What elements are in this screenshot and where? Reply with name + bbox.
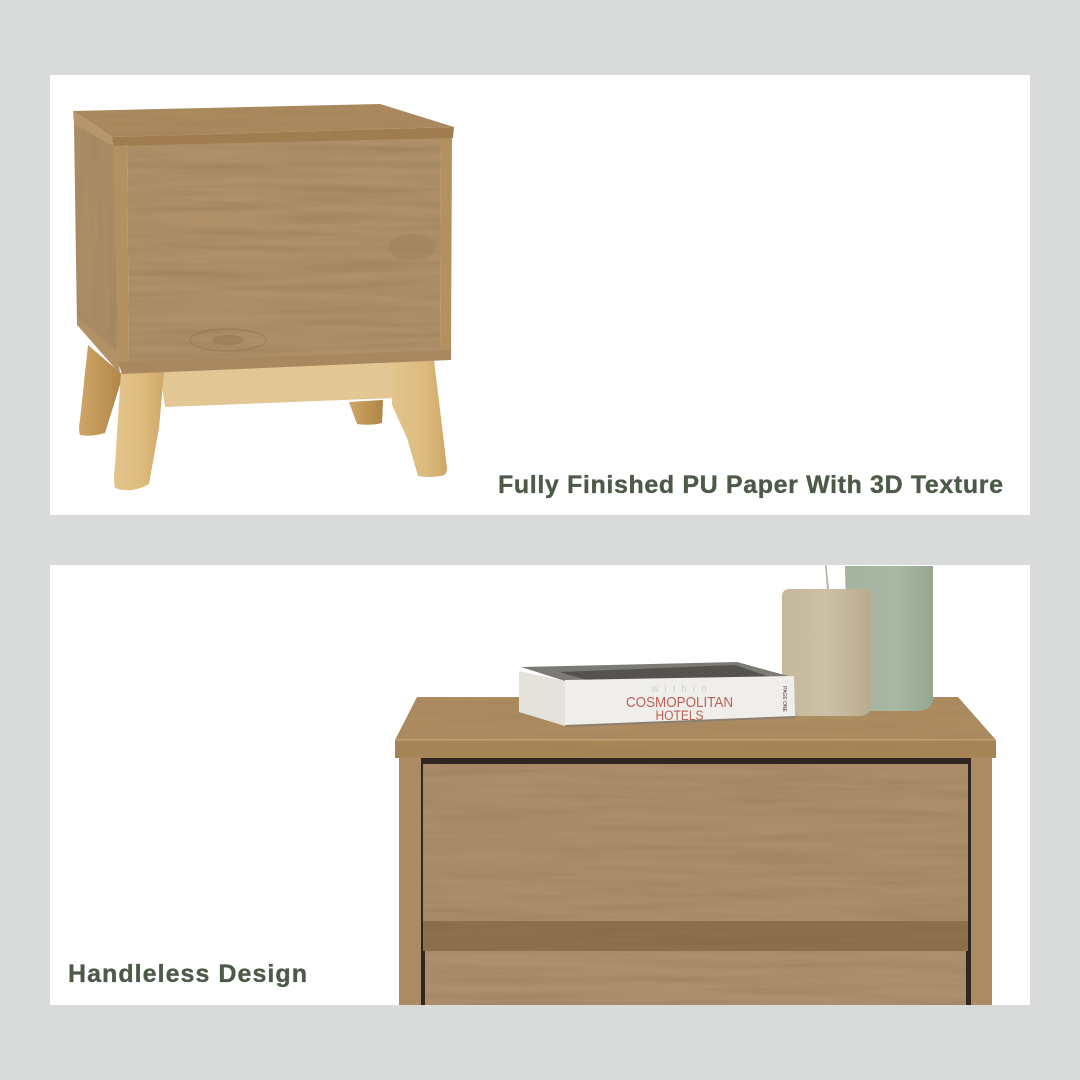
- panel: fully finished PU paper: [50, 75, 1030, 515]
- front leg left: [114, 372, 164, 490]
- lower side rail: [77, 317, 120, 374]
- image: vase, candle and book on drawer chest: [390, 565, 1000, 1005]
- side panel: [74, 124, 118, 352]
- book: [519, 662, 795, 727]
- lower drawer: [425, 951, 966, 1005]
- book title: COSMOPOLITAN: [626, 695, 733, 711]
- front panel: [125, 135, 443, 364]
- right post: [440, 136, 452, 352]
- chest interior: [420, 757, 973, 1005]
- book subtitle: HOTELS: [656, 708, 704, 723]
- candle wick: [825, 565, 829, 589]
- back leg left: [79, 345, 123, 436]
- bottom rail: [118, 350, 451, 374]
- top front edge: [112, 127, 454, 146]
- front leg right: [392, 360, 447, 477]
- left post: [113, 144, 129, 362]
- book text: within: within: [650, 684, 713, 695]
- chest side left: [399, 755, 421, 1005]
- panel: handleless design: [50, 565, 1030, 1005]
- handle recess: [423, 921, 968, 951]
- chest side right: [971, 755, 992, 1005]
- top face: [73, 104, 454, 137]
- caption: fully finished PU paper: Fully Finished PU Paper With 3D Texture: [498, 471, 1003, 499]
- vase: [845, 566, 933, 711]
- apron: [160, 362, 396, 407]
- top left edge: [73, 111, 113, 146]
- upper drawer: [423, 764, 968, 921]
- book publisher: PAGE ONE: [781, 686, 787, 713]
- candle: [782, 589, 871, 716]
- chest top: [390, 695, 1000, 760]
- back leg right: [349, 400, 383, 425]
- image: wooden bedside table with legs: [70, 100, 460, 490]
- caption: handleless design: Handleless Design: [68, 960, 307, 988]
